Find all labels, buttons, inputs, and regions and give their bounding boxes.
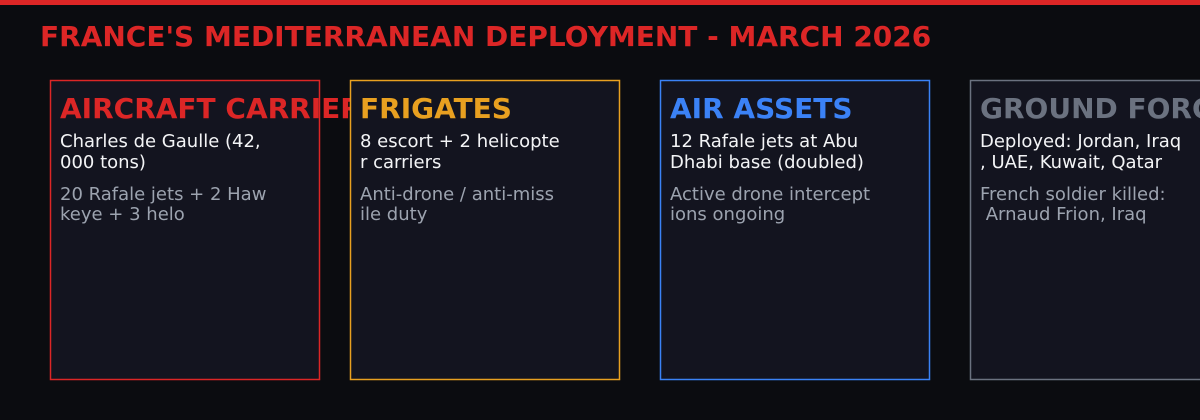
text: casualty: French soldier killed: [980, 184, 1166, 205]
heading: frigates: FRIGATES [360, 92, 512, 125]
text: rafale base: 12 Rafale jets at Abu [670, 131, 858, 152]
panel: air assets [660, 80, 930, 380]
text: frigate duty: ile duty [360, 204, 428, 225]
title: FRANCE'S MEDITERRANEAN DEPLOYMENT - MARCH 2026 [40, 20, 931, 53]
text: interceptions: Active drone intercept [670, 184, 870, 205]
text: frigate duty: Anti-drone / anti-miss [360, 184, 554, 205]
text: carrier aircraft: 20 Rafale jets + 2 Haw [60, 184, 266, 205]
text: deployment locations: Deployed: Jordan, Iraq [980, 131, 1181, 152]
text: carrier aircraft: keye + 3 helo [60, 204, 185, 225]
heading: aircraft carrier: AIRCRAFT CARRIER [60, 92, 362, 125]
text: casualty: Arnaud Frion, Iraq [980, 204, 1147, 225]
text: deployment locations: , UAE, Kuwait, Qatar [980, 152, 1163, 173]
text: carrier details: Charles de Gaulle (42, [60, 131, 261, 152]
heading: air assets: AIR ASSETS [670, 92, 853, 125]
text: frigate count: 8 escort + 2 helicopte [360, 131, 560, 152]
panel: aircraft carrier [50, 80, 362, 380]
text: rafale base: Dhabi base (doubled) [670, 152, 864, 173]
text: frigate count: r carriers [360, 152, 441, 173]
panel: ground forces [970, 80, 1200, 380]
panel: frigates [350, 80, 620, 380]
text: interceptions: ions ongoing [670, 204, 785, 225]
text: carrier details: 000 tons) [60, 152, 146, 173]
